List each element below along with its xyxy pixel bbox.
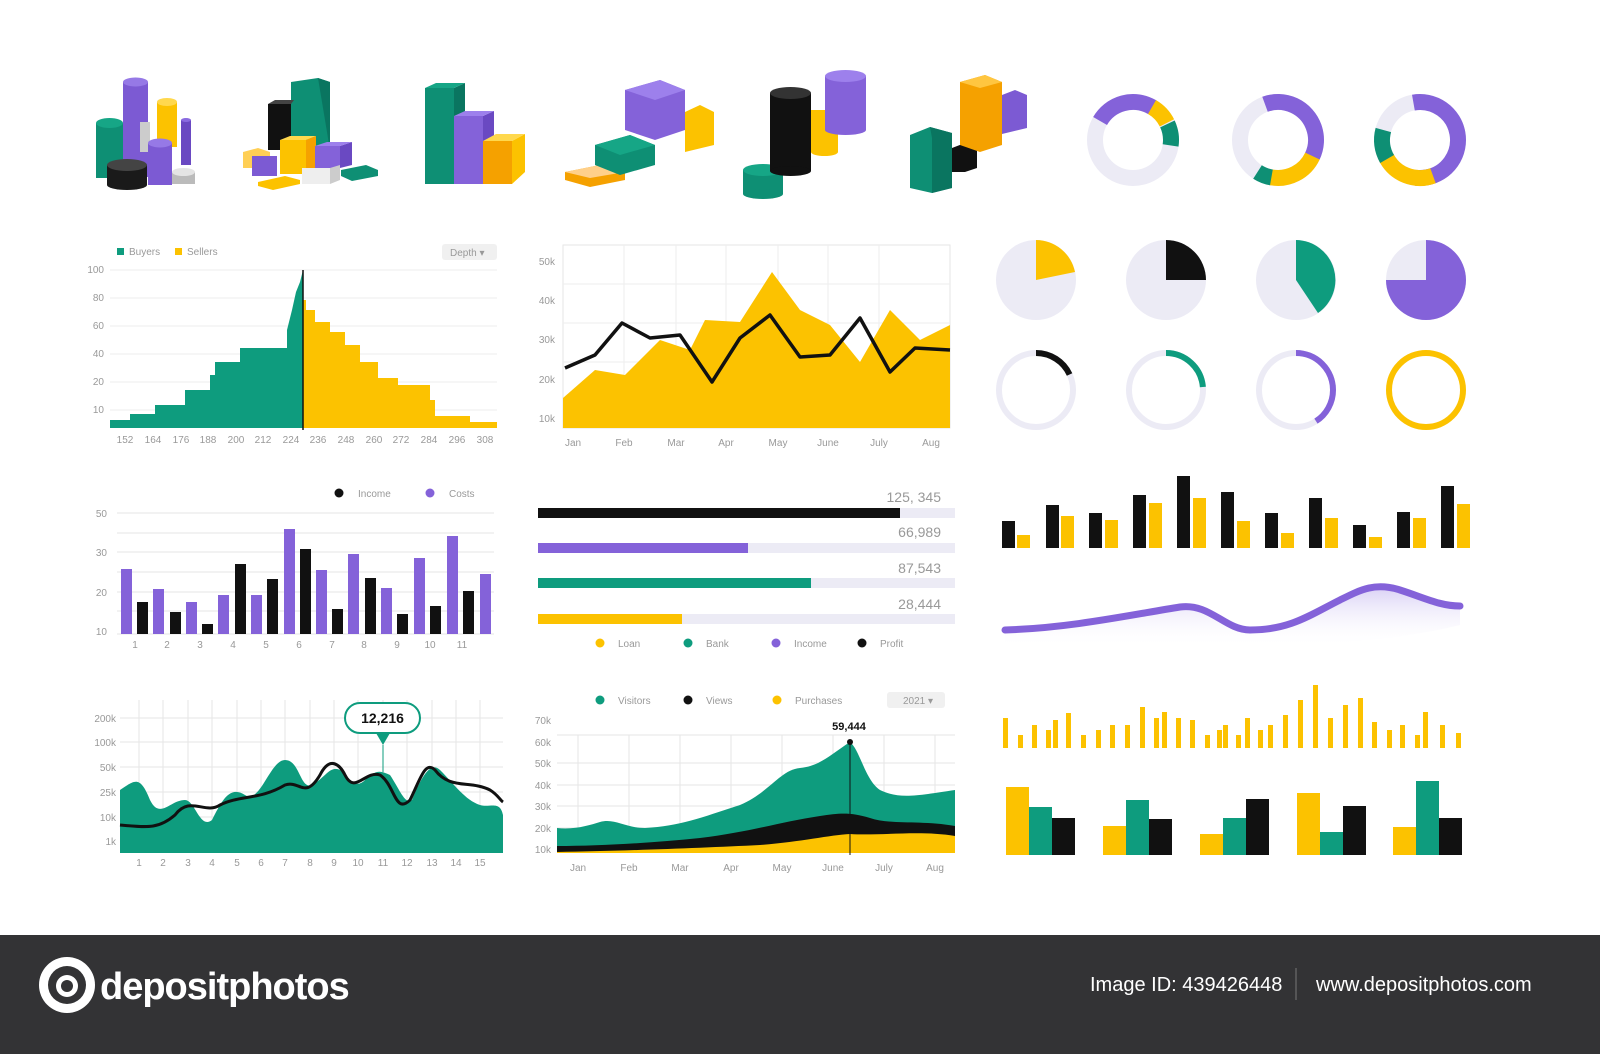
legend: loan bank income profit: Loan: [618, 639, 640, 650]
income costs bar chart: 7: [329, 640, 335, 651]
horizontal progress bars: 125, 345: [886, 489, 941, 505]
grouped bars: [1006, 781, 1462, 855]
area and line chart: Jan: [565, 438, 581, 449]
wavy area chart with callout: 15: [474, 858, 486, 869]
area and line chart: Feb: [615, 438, 633, 449]
3d donut 2: [1228, 90, 1328, 190]
area and line chart: Mar: [667, 438, 685, 449]
depth chart: 200: [228, 435, 245, 446]
depth chart: 20: [93, 377, 104, 388]
footer bar: www.depositphotos.com: [1315, 974, 1532, 996]
depth chart: 272: [393, 435, 410, 446]
income costs bar chart: 5: [263, 640, 269, 651]
area and line chart: Aug: [922, 438, 940, 449]
ring: purple: [1259, 353, 1333, 427]
depth chart: 60: [93, 321, 104, 332]
pie: teal: [1256, 240, 1336, 320]
wavy area chart with callout: 100k: [94, 738, 117, 749]
income costs bar chart: 3: [197, 640, 203, 651]
wavy area chart with callout: 1: [136, 858, 142, 869]
legend: loan bank income profit: Income: [794, 639, 827, 650]
income costs bar chart: 11: [457, 640, 468, 651]
thin yellow bars: [1003, 685, 1461, 748]
income costs bar chart: [96, 488, 494, 651]
ring: black: [999, 353, 1073, 427]
ring: teal: [1129, 353, 1203, 427]
wavy area chart with callout: 14: [450, 858, 462, 869]
depth chart: 260: [366, 435, 383, 446]
income costs bar chart: 30: [96, 548, 107, 559]
depth chart: 164: [145, 435, 162, 446]
depth chart: 296: [449, 435, 466, 446]
callout: 12,216: 12,216: [361, 710, 404, 726]
stacked area chart visitors views purchases: 40k: [535, 781, 552, 792]
income costs bar chart: 50: [96, 509, 107, 520]
income costs bar chart: 10: [424, 640, 436, 651]
horizontal progress bars: 66,989: [898, 524, 941, 540]
area and line chart: 40k: [539, 296, 556, 307]
stacked area chart visitors views purchases: 2021 ▾: [903, 696, 933, 707]
pie: yellow: [996, 240, 1076, 320]
depth chart: 10: [93, 405, 104, 416]
stacked area chart visitors views purchases: June: [822, 863, 844, 874]
legend: buyers sellers: Buyers: [129, 247, 160, 258]
wavy area chart with callout: 3: [185, 858, 191, 869]
depth chart: 80: [93, 293, 104, 304]
area and line chart: 30k: [539, 335, 556, 346]
wavy area chart with callout: 4: [209, 858, 215, 869]
horizontal progress bars: 87,543: [898, 560, 941, 576]
3d chart: stepped boxes: [565, 80, 714, 187]
income costs bar chart: 10: [96, 627, 107, 638]
area and line chart: 20k: [539, 375, 556, 386]
depth chart: [87, 244, 497, 446]
legend: buyers sellers: Sellers: [187, 247, 218, 258]
depth chart: 236: [310, 435, 327, 446]
depth chart: 212: [255, 435, 272, 446]
wavy area chart with callout: 13: [426, 858, 438, 869]
wavy area chart with callout: [94, 700, 503, 869]
stacked area chart visitors views purchases: 59,444: [832, 721, 867, 733]
income costs bar chart: 1: [132, 640, 138, 651]
wavy area chart with callout: 50k: [100, 763, 117, 774]
income costs bar chart: 4: [230, 640, 236, 651]
area and line chart: 10k: [539, 414, 556, 425]
wavy area chart with callout: 1k: [105, 837, 117, 848]
icon: camera logo: [39, 957, 95, 1013]
callout: 12,216: [345, 703, 420, 745]
income costs bar chart: 2: [164, 640, 170, 651]
stacked area chart visitors views purchases: [535, 692, 955, 874]
wavy area chart with callout: 7: [282, 858, 288, 869]
ring: yellow: [1389, 353, 1463, 427]
depth chart: 284: [421, 435, 438, 446]
wavy area chart with callout: 2: [160, 858, 166, 869]
wavy area chart with callout: 6: [258, 858, 264, 869]
stacked area chart visitors views purchases: July: [875, 863, 893, 874]
stacked area chart visitors views purchases: 20k: [535, 824, 552, 835]
depth chart: 224: [283, 435, 300, 446]
wavy area chart with callout: 9: [331, 858, 337, 869]
3d chart: mixed boxes: [910, 75, 1027, 193]
depth chart: 40: [93, 349, 104, 360]
wavy area chart with callout: 10k: [100, 813, 117, 824]
stacked area chart visitors views purchases: 30k: [535, 802, 552, 813]
wavy area chart with callout: 25k: [100, 788, 117, 799]
3d chart: three bars: [425, 83, 525, 184]
income costs bar chart: Income: [358, 489, 391, 500]
purple wave line: [1005, 587, 1460, 647]
footer bar: [0, 935, 1600, 1054]
area and line chart: Apr: [718, 438, 734, 449]
area and line chart: July: [870, 438, 888, 449]
depth chart: 248: [338, 435, 355, 446]
income costs bar chart: 20: [96, 588, 107, 599]
pie: black: [1126, 240, 1206, 320]
stacked area chart visitors views purchases: 50k: [535, 759, 552, 770]
stacked area chart visitors views purchases: Purchases: [795, 696, 842, 707]
area and line chart: 50k: [539, 257, 556, 268]
stacked area chart visitors views purchases: May: [773, 863, 791, 874]
area and line chart: [539, 245, 950, 449]
black yellow paired bars: [1002, 476, 1470, 548]
stacked area chart visitors views purchases: 70k: [535, 716, 552, 727]
wavy area chart with callout: 8: [307, 858, 313, 869]
horizontal progress bars: 28,444: [898, 596, 941, 612]
pie: purple: [1386, 240, 1466, 320]
3d donut 3: [1368, 88, 1472, 192]
depth chart: 100: [87, 265, 104, 276]
stacked area chart visitors views purchases: Jan: [570, 863, 586, 874]
3d donut 1: [1081, 88, 1185, 192]
wavy area chart with callout: 5: [234, 858, 240, 869]
footer bar: Image ID: 439426448: [1090, 974, 1282, 996]
stacked area chart visitors views purchases: Apr: [723, 863, 739, 874]
income costs bar chart: 8: [361, 640, 367, 651]
footer bar: depositphotos: [100, 966, 349, 1008]
depth chart: 188: [200, 435, 217, 446]
legend: loan bank income profit: [596, 638, 904, 650]
depth chart: 176: [173, 435, 190, 446]
legend: loan bank income profit: Bank: [706, 639, 730, 650]
income costs bar chart: 6: [296, 640, 302, 651]
3d chart: cylinders: [743, 70, 866, 199]
stacked area chart visitors views purchases: 10k: [535, 845, 552, 856]
stacked area chart visitors views purchases: Views: [706, 696, 732, 707]
wavy area chart with callout: 11: [378, 858, 389, 869]
area and line chart: June: [817, 438, 839, 449]
wavy area chart with callout: 10: [352, 858, 364, 869]
area and line chart: May: [769, 438, 787, 449]
depth chart: 308: [477, 435, 494, 446]
horizontal progress bars: [538, 489, 955, 650]
wavy area chart with callout: 12: [401, 858, 413, 869]
legend: buyers sellers: Depth ▾: [450, 248, 484, 259]
legend: buyers sellers: [117, 244, 497, 260]
stacked area chart visitors views purchases: Mar: [671, 863, 689, 874]
income costs bar chart: Costs: [449, 489, 475, 500]
depth chart: 152: [117, 435, 134, 446]
stacked area chart visitors views purchases: Visitors: [618, 696, 651, 707]
income costs bar chart: 9: [394, 640, 400, 651]
3d chart: boxes cluster: [243, 78, 378, 190]
stacked area chart visitors views purchases: 60k: [535, 738, 552, 749]
stacked area chart visitors views purchases: Feb: [620, 863, 638, 874]
legend: loan bank income profit: Profit: [880, 639, 904, 650]
wavy area chart with callout: 200k: [94, 714, 117, 725]
stacked area chart visitors views purchases: Aug: [926, 863, 944, 874]
3d chart: cylinders cluster: [96, 78, 195, 190]
